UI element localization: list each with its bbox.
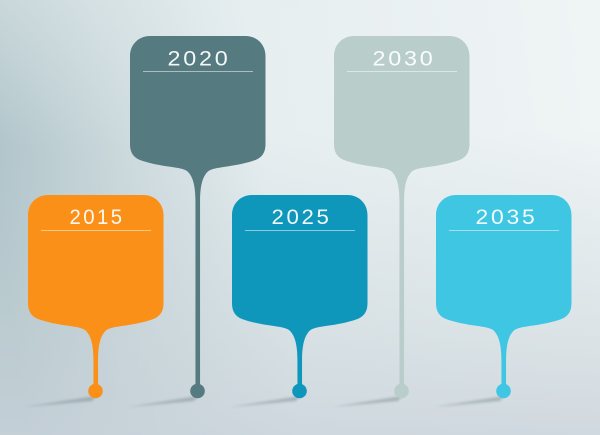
- dot: 2020: [190, 384, 205, 398]
- divider: 2015: [41, 230, 151, 231]
- panel: 2020 box with stem: [130, 36, 266, 391]
- divider: 2025: [245, 230, 355, 231]
- marker: 2020 teal: [130, 36, 266, 398]
- floor shadows: [24, 396, 504, 407]
- dot: 2035: [496, 384, 511, 398]
- panel: 2035 box with stem: [436, 195, 572, 391]
- marker: 2030 grey: [334, 36, 470, 398]
- panel: 2025 box with stem: [232, 195, 368, 391]
- year: 2035: 2035: [476, 206, 538, 229]
- marker: 2025 blue: [232, 195, 368, 398]
- divider: 2035: [449, 230, 559, 231]
- year: 2015: 2015: [70, 206, 124, 229]
- year: 2025: 2025: [272, 206, 332, 229]
- dot: 2030: [394, 384, 409, 398]
- dot: 2015: [88, 384, 103, 398]
- panel: 2015 box with stem: [28, 195, 164, 391]
- dot: 2025: [292, 384, 307, 398]
- marker: 2035 cyan: [436, 195, 572, 398]
- year: 2030: 2030: [372, 48, 436, 70]
- marker: 2015 orange: [28, 195, 164, 398]
- year: 2020: 2020: [168, 48, 230, 70]
- divider: 2030: [347, 71, 457, 72]
- panel: 2030 box with stem: [334, 36, 470, 391]
- divider: 2020: [143, 71, 253, 72]
